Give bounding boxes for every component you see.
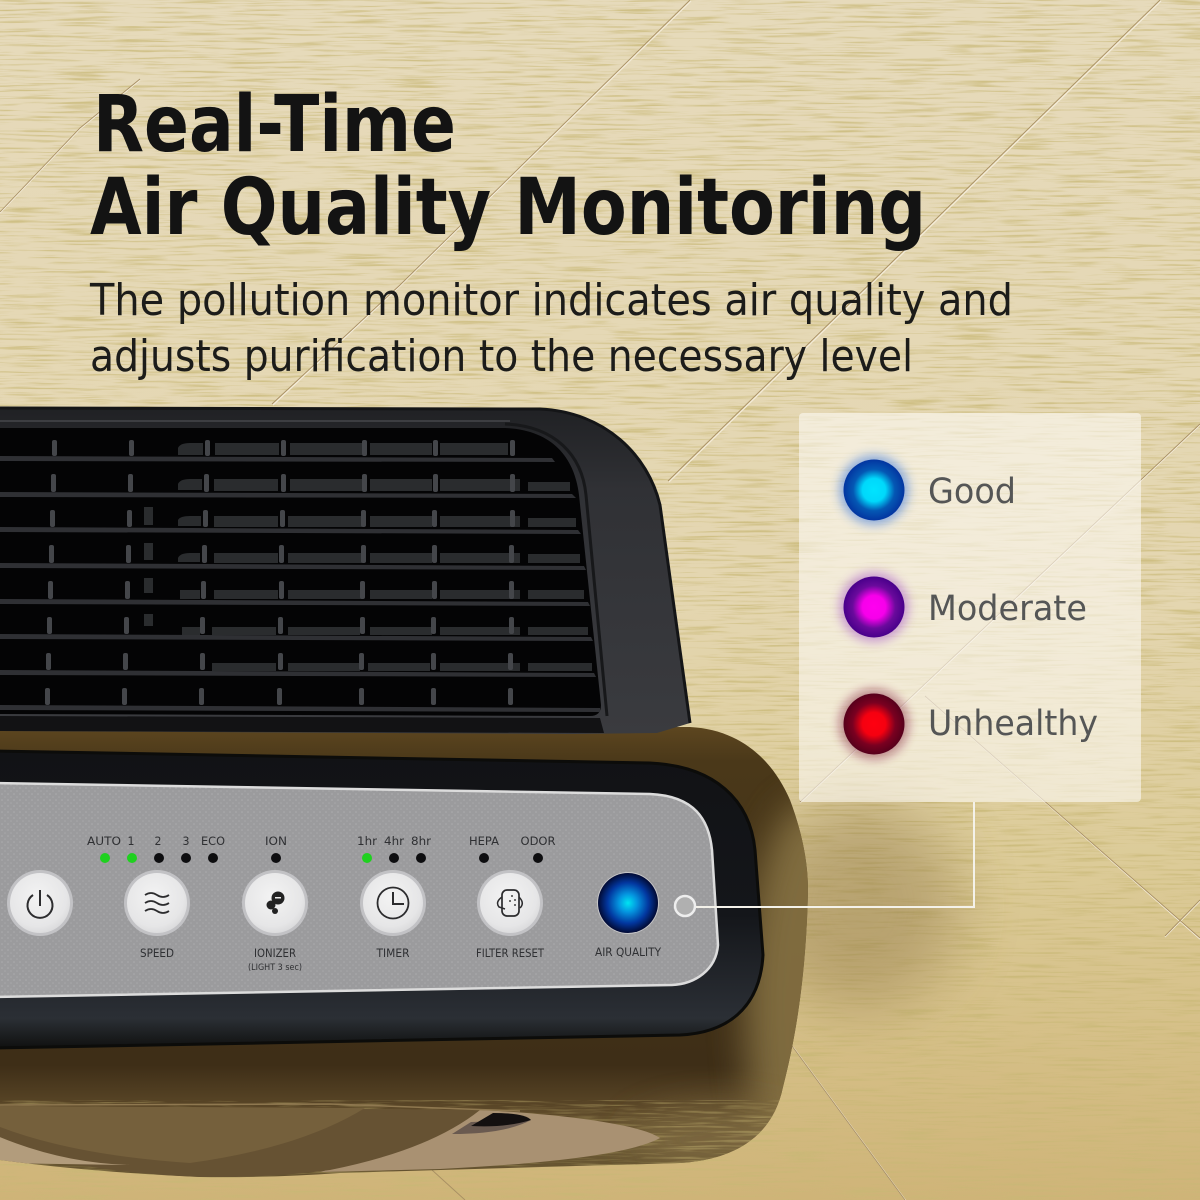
subtitle: The pollution monitor indicates air quality and [89, 275, 1013, 326]
legend: moderate: Moderate [928, 589, 1087, 629]
title: Real-Time [93, 80, 456, 170]
speed indicators: AUTO [87, 834, 121, 848]
purifier body [0, 727, 808, 1178]
control panel [0, 783, 718, 997]
button: speed [124, 870, 190, 936]
horizontal slats [0, 456, 600, 712]
callout connector [675, 802, 974, 916]
button: filter reset [477, 870, 543, 936]
light base reflection [320, 1110, 660, 1172]
subtitle [89, 275, 1013, 382]
dark opening [452, 1120, 531, 1134]
inner filter bars [144, 443, 592, 671]
button: ionizer [242, 870, 308, 936]
filter indicators: HEPA [469, 834, 499, 848]
filter indicators [469, 834, 556, 863]
air quality light [597, 872, 659, 934]
timer indicators: 8hr [411, 834, 431, 848]
timer indicators: 4hr [384, 834, 404, 848]
legend: good [839, 455, 1016, 525]
timer indicators [357, 834, 431, 863]
speed indicators: ECO [201, 834, 225, 848]
control panel frame [0, 751, 763, 1048]
label: timer: TIMER [376, 946, 410, 960]
speed indicators: 3 [182, 834, 190, 848]
shadow on floor [760, 800, 960, 1010]
subtitle: adjusts purification to the necessary level [90, 331, 913, 382]
label: air quality: AIR QUALITY [595, 945, 662, 959]
speed indicators: 1 [128, 834, 134, 848]
label: ionizer: (LIGHT 3 sec) [248, 963, 302, 973]
legend: unhealthy: Unhealthy [928, 704, 1098, 744]
timer indicators: 1hr [357, 834, 377, 848]
label: speed: SPEED [140, 946, 174, 960]
label: ionizer: IONIZER [254, 946, 296, 960]
purifier top housing [0, 408, 690, 734]
air grille [0, 425, 610, 720]
title [90, 80, 926, 253]
button: power [7, 870, 73, 936]
legend: moderate [839, 572, 1087, 642]
vertical ribs [45, 440, 515, 705]
speed indicators: 2 [154, 834, 162, 848]
legend: unhealthy [839, 689, 1098, 759]
title: Air Quality Monitoring [90, 163, 926, 253]
label: ionizer [248, 946, 302, 973]
legend panel [799, 413, 1141, 802]
button: timer [360, 870, 426, 936]
ion indicator: ION [265, 834, 287, 848]
filter indicators: ODOR [520, 834, 556, 848]
speed indicators [87, 834, 225, 863]
ion indicator [265, 834, 287, 863]
legend: good: Good [928, 472, 1016, 512]
bowl reflection [0, 1106, 480, 1177]
label: filter reset: FILTER RESET [476, 946, 545, 960]
